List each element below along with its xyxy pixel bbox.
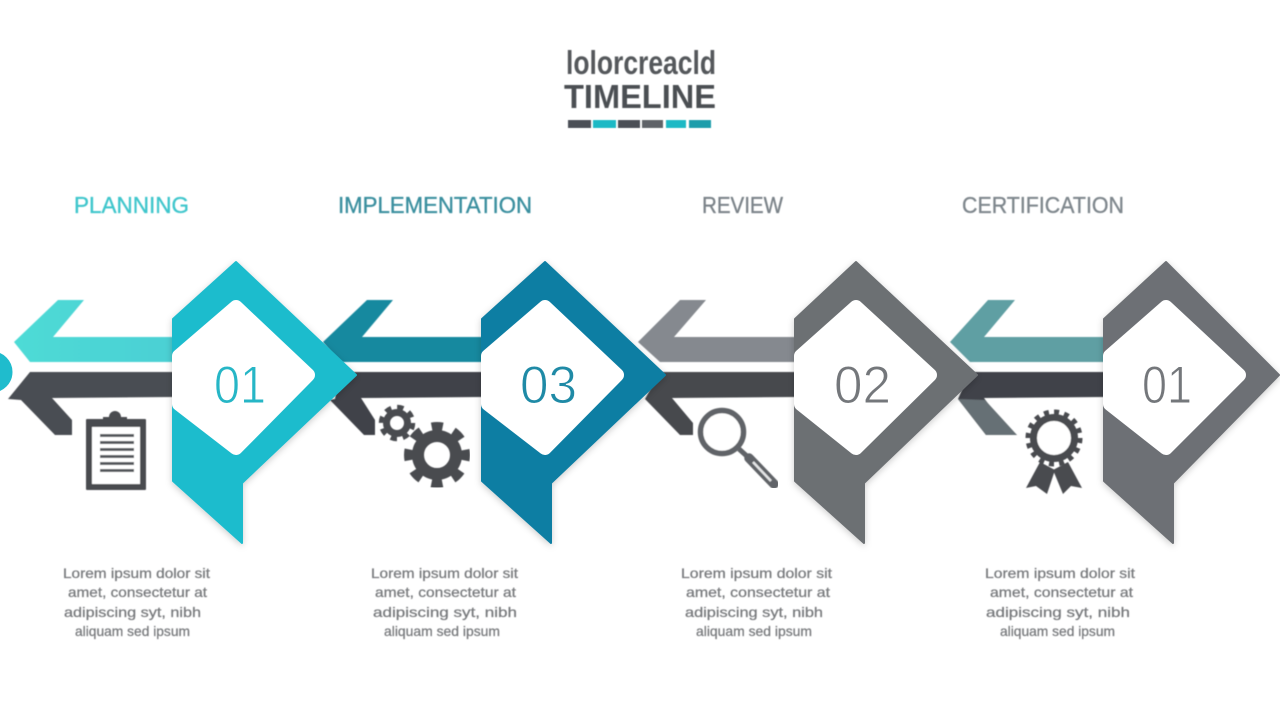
heading: planning: PLANNING xyxy=(74,192,189,218)
text block: planning: aliquam sed ipsum xyxy=(75,623,190,639)
arrows: implementation xyxy=(323,300,482,435)
text block: certification xyxy=(985,565,1135,639)
text block: review: aliquam sed ipsum xyxy=(696,623,812,639)
panel: step 02 review xyxy=(795,262,977,543)
heading: implementation: IMPLEMENTATION xyxy=(338,192,532,218)
arrows: review xyxy=(638,300,795,435)
panel: step 01 certification xyxy=(1104,262,1279,543)
text block: review: amet, consectetur at xyxy=(686,584,830,600)
number 03: 03 xyxy=(520,356,577,415)
text block: implementation: Lorem ipsum dolor sit xyxy=(371,565,518,581)
text block: implementation xyxy=(371,565,518,639)
icon: award badge xyxy=(1026,412,1082,494)
text block: review: adipiscing syt, nibh xyxy=(685,604,823,620)
title: lolorcreacld xyxy=(566,44,716,81)
text block: certification: Lorem ipsum dolor sit xyxy=(985,565,1135,581)
title underline bars xyxy=(568,120,711,128)
title: TIMELINE xyxy=(564,78,716,115)
text block: planning: adipiscing syt, nibh xyxy=(64,604,201,620)
text block: certification: aliquam sed ipsum xyxy=(1000,623,1115,639)
heading: certification: CERTIFICATION xyxy=(962,192,1124,218)
number 02: 02 xyxy=(834,356,891,415)
text block: review: Lorem ipsum dolor sit xyxy=(681,565,832,581)
text block: review xyxy=(681,565,832,639)
panel: step 03 implementation xyxy=(482,262,665,543)
icon: magnifier xyxy=(700,410,774,484)
number 01: 01 xyxy=(1142,356,1192,415)
number 01: 01 xyxy=(214,356,266,415)
text block: implementation: aliquam sed ipsum xyxy=(384,623,500,639)
text block: implementation: amet, consectetur at xyxy=(375,584,516,600)
title xyxy=(564,44,716,115)
arrows: certification xyxy=(950,300,1104,435)
text block: certification: adipiscing syt, nibh xyxy=(986,604,1130,620)
text block: planning: amet, consectetur at xyxy=(68,584,207,600)
text block: certification: amet, consectetur at xyxy=(990,584,1133,600)
heading: review: REVIEW xyxy=(702,192,783,218)
text block: implementation: adipiscing syt, nibh xyxy=(373,604,517,620)
text block: planning xyxy=(63,565,210,639)
start node xyxy=(0,349,15,395)
arrows: planning xyxy=(8,300,173,435)
panel: step 01 planning xyxy=(173,262,356,543)
icon: gears xyxy=(381,407,466,484)
icon: clipboard xyxy=(86,411,146,490)
text block: planning: Lorem ipsum dolor sit xyxy=(63,565,210,581)
